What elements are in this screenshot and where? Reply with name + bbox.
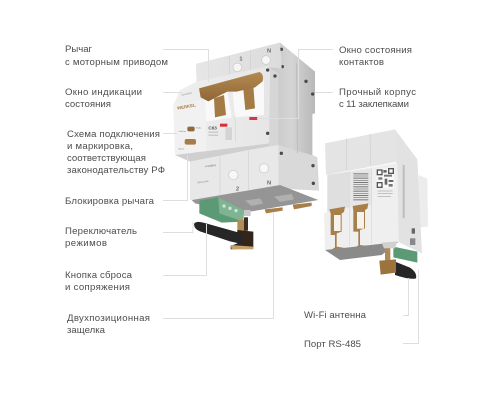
- label: wiring diagram: [67, 129, 165, 176]
- main front panel: C63: [208, 125, 217, 130]
- label: status window: Окно индикации: [65, 87, 142, 98]
- main front panel: [173, 66, 270, 162]
- main front panel: Radio: [196, 128, 202, 130]
- label: wiring diagram: и маркировка,: [67, 141, 133, 152]
- rear face top: [325, 129, 397, 175]
- label: housing: Прочный корпус: [339, 87, 416, 98]
- lower terminal block: N: [267, 181, 271, 187]
- label: latch: [67, 313, 150, 336]
- bronze latch: [231, 217, 253, 249]
- label: wiring diagram: Схема подключения: [67, 129, 160, 140]
- label: RS-485 port: Порт RS-485: [304, 339, 361, 350]
- bottom of front device: [192, 185, 318, 249]
- label: contacts window: Окно состояния: [339, 45, 412, 56]
- label: mode switch: [65, 226, 137, 249]
- side housing: [196, 43, 319, 191]
- lower terminal block: 2: [236, 186, 239, 192]
- upper terminal block: [196, 43, 282, 83]
- QR code: [377, 169, 394, 197]
- label: lever: [65, 44, 168, 68]
- upper terminal block: N: [267, 49, 271, 55]
- label: housing: [339, 87, 416, 110]
- front breaker device: [173, 43, 319, 200]
- label: status window: [65, 87, 142, 110]
- main front panel: WERKEL: [177, 102, 196, 111]
- upper terminal block: 1: [239, 57, 242, 63]
- rear breaker device: [324, 129, 428, 279]
- motor lever: [199, 72, 264, 122]
- bottom gray plate: [192, 185, 318, 213]
- label: reset button: [65, 270, 133, 293]
- label: mode switch: режимов: [65, 238, 107, 249]
- label: housing: с 11 заклепками: [339, 99, 409, 110]
- label: lever: с моторным приводом: [65, 57, 168, 68]
- label: reset button: и сопряжения: [65, 282, 130, 293]
- rear face bottom: [324, 163, 399, 250]
- bronze feet: [265, 207, 283, 213]
- lower terminal block: ▪ Heating: [205, 163, 216, 168]
- barcode label: [353, 173, 368, 200]
- label: contacts window: контактов: [339, 57, 384, 68]
- label: reset button: Кнопка сброса: [65, 270, 133, 281]
- label: mode switch: Переключатель: [65, 226, 137, 237]
- label: wiring diagram: соответствующая: [67, 153, 146, 164]
- label: latch: Двухпозиционная: [67, 313, 150, 324]
- label: lever: Рычаг: [65, 44, 92, 55]
- leader lines: [163, 50, 418, 344]
- label: lever lock: Блокировка рычага: [65, 196, 155, 207]
- bronze lock: [379, 248, 396, 275]
- label: latch: защелка: [67, 325, 106, 336]
- label: contacts window: [339, 45, 412, 68]
- main front panel: Operating: [181, 91, 193, 97]
- label: status window: состояния: [65, 99, 111, 110]
- lower terminal block: Smart Line: [197, 180, 209, 184]
- bronze clips: [329, 203, 368, 251]
- label: wiring diagram: законодательству РФ: [67, 165, 165, 176]
- Wi-Fi antenna: [395, 262, 416, 279]
- bottom plate: [325, 242, 398, 260]
- label: Wi-Fi antenna: Wi-Fi антенна: [304, 310, 367, 321]
- green terminal RS-485: [199, 197, 251, 223]
- lower terminal block: [190, 145, 278, 200]
- main front panel: Inflexion: [179, 131, 186, 133]
- main front panel: Unlock: [178, 148, 184, 150]
- right side housing: [395, 129, 422, 253]
- Wi-Fi antenna: [194, 222, 242, 244]
- green terminal: [382, 241, 417, 263]
- side protrusion: [418, 175, 428, 227]
